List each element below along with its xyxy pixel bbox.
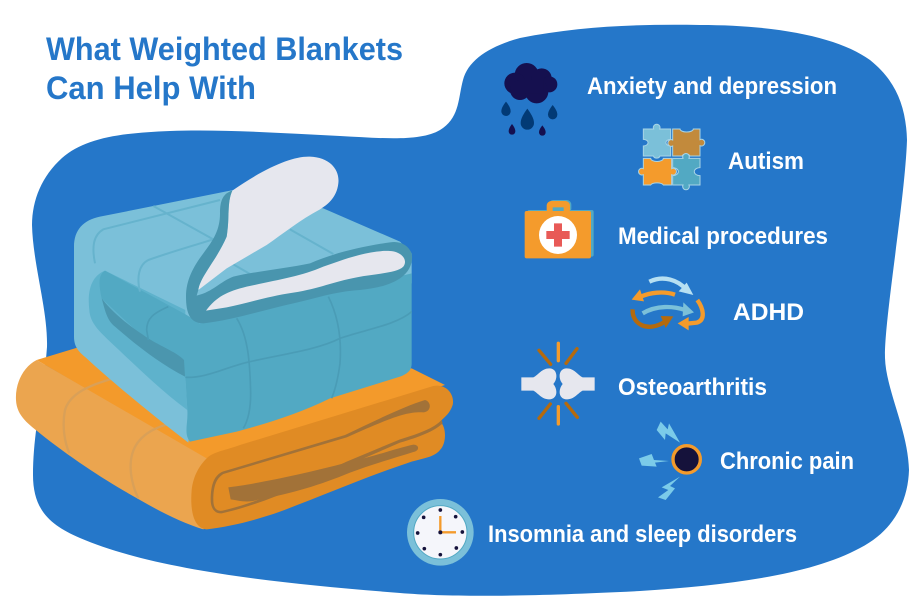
icon: clock: [407, 499, 474, 566]
label: Osteoarthritis: [618, 374, 767, 401]
icon: first aid kit: [525, 200, 594, 258]
item: anxiety and depression: [501, 63, 837, 136]
item: medical procedures: [525, 200, 828, 258]
icon: swirling arrows: [632, 279, 703, 330]
orange blanket: [16, 348, 453, 529]
label: ADHD: [733, 299, 804, 326]
item: insomnia and sleep disorders: [407, 499, 797, 566]
icon: joint bones: [521, 343, 595, 424]
title: Can Help With: [46, 70, 256, 106]
title: What Weighted Blankets: [46, 31, 403, 67]
item: chronic pain: [639, 422, 854, 500]
blue blanket: [74, 190, 412, 443]
label: Autism: [728, 148, 804, 175]
icon: rain cloud: [501, 63, 557, 136]
icon: puzzle pieces: [639, 124, 705, 190]
label: Anxiety and depression: [587, 73, 837, 100]
illustration: stacked weighted blankets: [16, 157, 453, 529]
label: Insomnia and sleep disorders: [488, 521, 797, 548]
folded blanket corner with white lining: [186, 157, 412, 323]
icon: pain point with lightning bolts: [639, 422, 700, 500]
item: ADHD: [632, 279, 804, 330]
title: [46, 31, 403, 106]
item: autism: [639, 124, 804, 190]
label: Chronic pain: [720, 448, 854, 475]
item: osteoarthritis: [521, 343, 767, 424]
label: Medical procedures: [618, 223, 828, 250]
